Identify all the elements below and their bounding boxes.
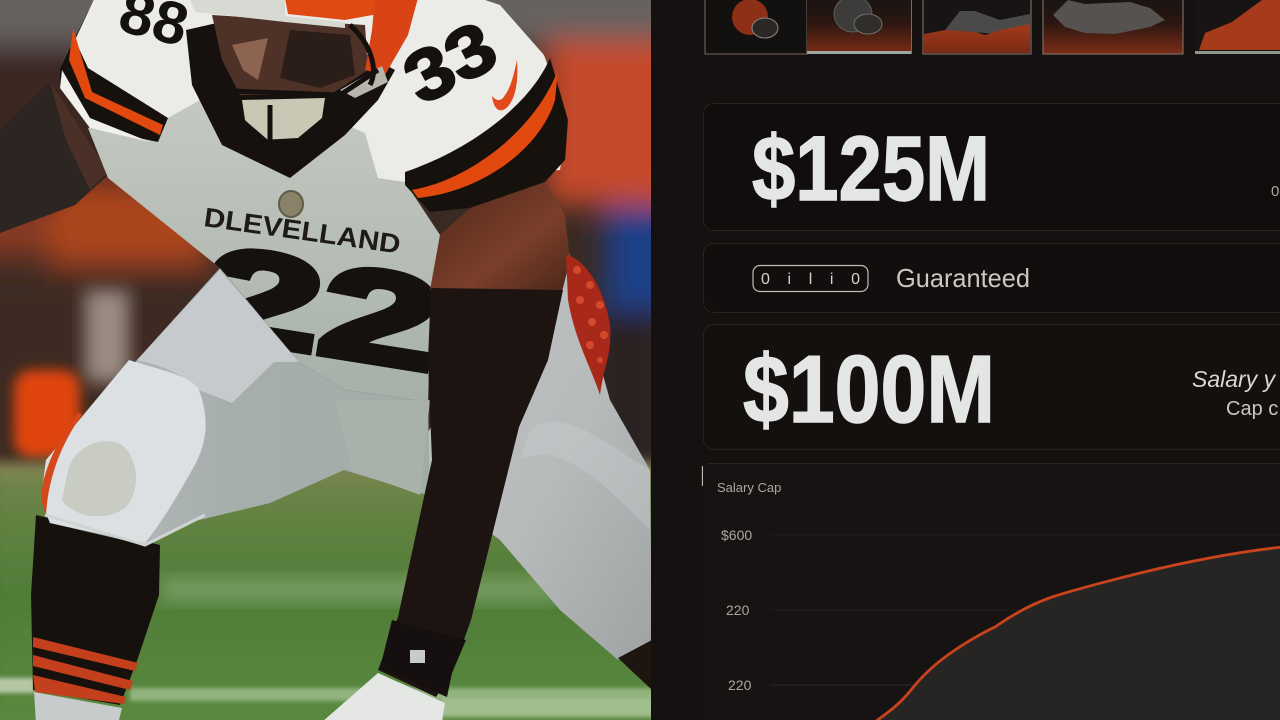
- left arm sleeve: [0, 82, 108, 233]
- chest collar badge: [279, 191, 303, 217]
- jersey body: [88, 100, 440, 402]
- edge label: 0: [1271, 183, 1279, 200]
- wrist band: [380, 620, 466, 697]
- jersey wordmark: DLEVELLAND: [202, 202, 402, 259]
- big number: $125M: [752, 118, 990, 220]
- chest number: 22: [194, 217, 450, 399]
- jersey shoulders: [60, 0, 568, 212]
- thumbnail: terrain: [923, 0, 1031, 54]
- right dashboard panel: [651, 0, 1280, 720]
- thumbnail: orange peak: [1195, 0, 1280, 54]
- side label bottom: Cap c: [1226, 398, 1278, 420]
- right arm skin: [430, 182, 570, 292]
- stadium background: [0, 0, 690, 720]
- thumbnails row: [705, 0, 1280, 54]
- thumbnail: helmet orange: [705, 0, 807, 54]
- thumbnail: shoe: [1043, 0, 1183, 54]
- shoulder number right: 33: [391, 6, 510, 120]
- card: $100M: [704, 324, 1280, 450]
- card: guaranteed: [704, 244, 1280, 312]
- grid lines: [770, 535, 1280, 685]
- area under curve: [875, 547, 1280, 720]
- left thigh and knee: [41, 268, 430, 545]
- pill badge: 0 i l i 0: [761, 271, 860, 288]
- guaranteed label: Guaranteed: [896, 263, 1030, 293]
- trend line: [875, 547, 1280, 720]
- thumbnail: helmet gray: [807, 0, 912, 54]
- photo panel: football player: [0, 0, 690, 720]
- chart title: Salary Cap: [717, 480, 781, 495]
- helmet and facemask: [186, 0, 418, 178]
- knee pad: [41, 360, 206, 543]
- bead chain: [566, 255, 610, 395]
- y axis labels: 220: [728, 677, 752, 693]
- right leg: [428, 252, 651, 689]
- white glove: [322, 673, 445, 720]
- card: $125M: [704, 104, 1280, 230]
- y axis labels: [721, 527, 752, 693]
- black arm sleeve: [378, 288, 563, 697]
- knee dirt patch: [62, 441, 136, 516]
- y axis labels: $600: [721, 527, 752, 543]
- upper hip pad: [137, 270, 299, 403]
- icon: swoosh: [492, 60, 517, 110]
- pill badge: [753, 266, 868, 292]
- side label top: Salary y: [1192, 366, 1277, 392]
- mouth guard: [242, 98, 325, 140]
- knee piping: [41, 412, 82, 515]
- y axis labels: 220: [726, 602, 750, 618]
- chart: salary cap: [702, 464, 1280, 720]
- big number: $100M: [743, 336, 995, 443]
- left sock: [31, 515, 160, 720]
